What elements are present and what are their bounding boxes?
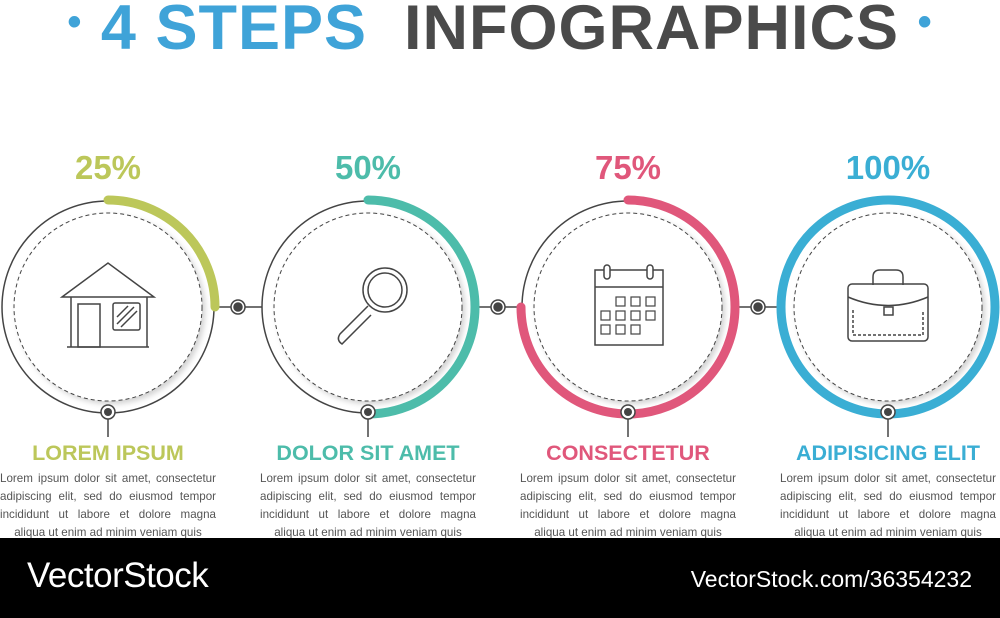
step 2 circle xyxy=(261,200,475,437)
heading 2: DOLOR SIT AMET xyxy=(276,441,460,465)
percentages: 50% xyxy=(335,149,401,186)
heading 3: CONSECTETUR xyxy=(546,441,710,465)
percentages: 75% xyxy=(595,149,661,186)
step 4 circle xyxy=(781,200,995,437)
step 1 circle xyxy=(1,200,215,437)
percentages: 100% xyxy=(846,149,930,186)
icon: calendar xyxy=(595,265,663,345)
footer xyxy=(0,538,1000,618)
footer logo: VectorStock xyxy=(27,556,208,595)
percentages xyxy=(75,149,930,186)
percentages: 25% xyxy=(75,149,141,186)
icon: house xyxy=(62,263,154,347)
heading 1: LOREM IPSUM xyxy=(32,441,184,465)
step 3 circle xyxy=(521,200,735,437)
footer url: VectorStock.com/36354232 xyxy=(691,566,972,592)
icon: briefcase xyxy=(848,270,928,341)
icon: magnifier xyxy=(338,268,407,344)
text 4: Lorem ipsum dolor sit amet, consectetur adipiscing elit, sed do eiusmod tempor incididunt ut labore et dolore magna aliqua ut enim ad minim veniam quis xyxy=(780,472,996,539)
heading 4: ADIPISICING ELIT xyxy=(796,441,980,465)
connectors xyxy=(214,300,782,314)
text 1: Lorem ipsum dolor sit amet, consectetur adipiscing elit, sed do eiusmod tempor incididunt ut labore et dolore magna aliqua ut enim ad minim veniam quis xyxy=(0,472,216,539)
text 3: Lorem ipsum dolor sit amet, consectetur adipiscing elit, sed do eiusmod tempor incididunt ut labore et dolore magna aliqua ut enim ad minim veniam quis xyxy=(520,472,736,539)
text 2: Lorem ipsum dolor sit amet, consectetur adipiscing elit, sed do eiusmod tempor incididunt ut labore et dolore magna aliqua ut enim ad minim veniam quis xyxy=(260,472,476,539)
